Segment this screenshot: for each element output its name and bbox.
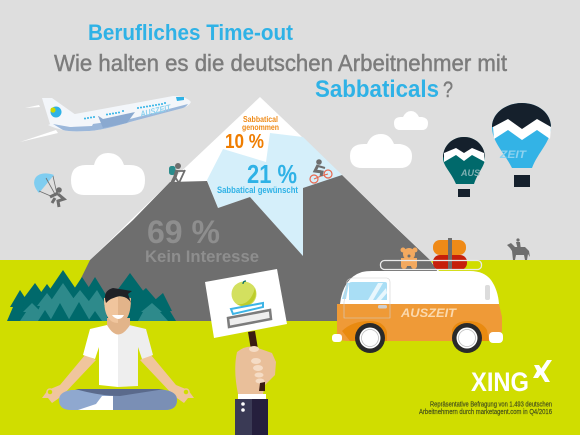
title: Sabbaticals <box>315 76 439 103</box>
label: 10 percent: genommen <box>242 122 279 132</box>
luggage <box>433 238 467 270</box>
icon: teddy bear <box>400 248 418 269</box>
title: ? <box>443 77 453 102</box>
source note: Repräsentative Befragung von 1.493 deutschen <box>430 402 552 408</box>
icon: parachutist <box>34 173 64 207</box>
van <box>332 238 503 353</box>
label: 69 percent: 69 % <box>147 214 220 250</box>
icon: books <box>228 303 271 327</box>
label: 21 percent: 21 % <box>247 159 297 189</box>
cloud left <box>71 153 145 195</box>
source note <box>419 402 552 416</box>
icon: balloon small <box>443 137 485 197</box>
icon: apple <box>232 281 256 306</box>
person meditating <box>42 288 194 410</box>
label: 10 percent: Sabbatical <box>243 114 278 124</box>
icon: airplane <box>20 96 191 142</box>
icon: horse rider <box>507 238 530 260</box>
title: Wie halten es die deutschen Arbeitnehmer mit <box>54 50 508 76</box>
icon: balloon large: ZEIT <box>499 149 527 161</box>
wheels <box>355 323 482 353</box>
hand holding sign <box>235 346 276 435</box>
icon: balloon small: AUS <box>460 168 480 178</box>
logo: XING <box>471 360 552 397</box>
icon: balloon large <box>492 103 551 187</box>
picket sign <box>205 269 287 392</box>
icon: airplane: AUSZEIT <box>138 102 172 119</box>
label: 21 percent: Sabbatical gewünscht <box>217 185 298 195</box>
cloud right <box>350 134 412 168</box>
source note: Arbeitnehmern durch marketagent.com in Q4/2016 <box>419 409 552 416</box>
label: 21 percent <box>217 159 298 195</box>
forest <box>7 270 176 321</box>
title: Berufliches Time-out <box>88 20 294 45</box>
title <box>54 20 508 103</box>
label: 69 percent <box>145 214 259 266</box>
label: 10 percent: 10 % <box>225 131 264 153</box>
cloud small <box>394 111 428 130</box>
label: 69 percent: Kein Interesse <box>145 247 259 266</box>
icon: hiker <box>169 163 185 183</box>
label: 10 percent <box>225 114 279 153</box>
logo: XING: XING <box>471 367 529 397</box>
mountain chart <box>60 97 480 321</box>
van: AUSZEIT <box>400 308 457 320</box>
icon: cyclist <box>310 159 332 183</box>
